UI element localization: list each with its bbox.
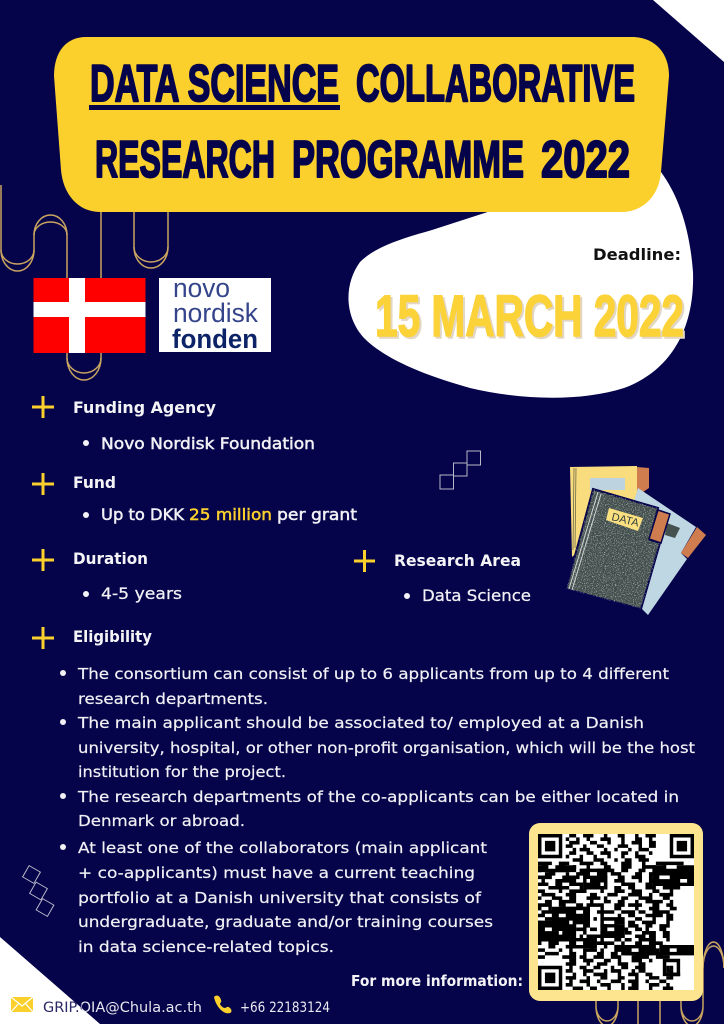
corner triangle: top right [653,0,724,62]
flag of Denmark [34,278,146,353]
corner triangle: bottom left [0,937,100,1024]
title line 1 [89,55,635,113]
eligibility list: portfolio at a Danish university that consists of [78,889,482,907]
deadline blob [348,172,693,398]
eligibility list [60,665,695,956]
section: eligibility heading: Eligibility [73,627,153,646]
title banner [54,37,669,212]
section: funding agency [32,396,315,453]
section: research area: Data Science [422,586,531,605]
section: duration [32,549,182,603]
eligibility list: institution for the project. [78,763,286,781]
title line 2: PROGRAMME [292,131,524,189]
icon: data folders: DATA [610,511,641,530]
eligibility list: The research departments of the co-applicants can be either located in [77,788,679,806]
logo: Novo Nordisk Fonden: nordisk [173,298,258,328]
section: fund [32,473,357,524]
icon: data folders [566,466,706,615]
paperclip decoration: bottom right [596,942,724,1024]
eligibility list: The main applicant should be associated to/ employed at a Danish [77,714,644,732]
eligibility list: + co-applicants) must have a current teaching [78,864,475,882]
title line 2: RESEARCH [95,131,275,189]
QR code modules [538,834,694,990]
title line 2: 2022 [541,131,630,189]
eligibility list: in data science-related topics. [78,938,334,956]
section: eligibility heading [32,627,153,649]
section: research area: Research Area [394,551,521,570]
section: duration: Duration [73,549,148,568]
logo: Novo Nordisk Fonden: novo [173,273,230,303]
eligibility list: research departments. [78,690,268,708]
section: funding agency: Novo Nordisk Foundation [101,434,315,453]
logo: Novo Nordisk Fonden [159,273,271,354]
icon: phone [214,996,232,1013]
eligibility list: university, hospital, or other non-profit organisation, which will be the host [78,739,695,757]
decorative squares: upper [440,451,480,489]
logo: Novo Nordisk Fonden: fonden [172,324,258,354]
QR code card [529,823,703,1001]
section: fund: Fund [73,473,116,492]
eligibility list: Denmark or abroad. [78,812,245,830]
deadline label: Deadline: [593,245,681,264]
section: research area [354,550,531,605]
eligibility list: The consortium can consist of up to 6 applicants from up to 4 different [77,665,669,683]
title line 1: DATA SCIENCE [90,55,339,113]
paperclip decoration: left [1,185,168,380]
section: fund: per grant [277,505,357,524]
decorative squares: lower left [23,866,54,916]
section: duration: 4-5 years [101,584,182,603]
icon: mail [11,997,33,1012]
email address: GRIP.OIA@Chula.ac.th [43,1000,202,1016]
section: fund: Up to DKK [101,505,185,524]
eligibility list: undergraduate, graduate and/or training courses [78,913,493,931]
eligibility list: At least one of the collaborators (main applicant [78,839,487,857]
section: fund: 25 million [189,505,272,524]
for more information label: For more information: [351,972,523,990]
phone number: +66 22183124 [240,1000,330,1016]
title line 2 [95,131,630,189]
section: funding agency: Funding Agency [73,398,217,417]
